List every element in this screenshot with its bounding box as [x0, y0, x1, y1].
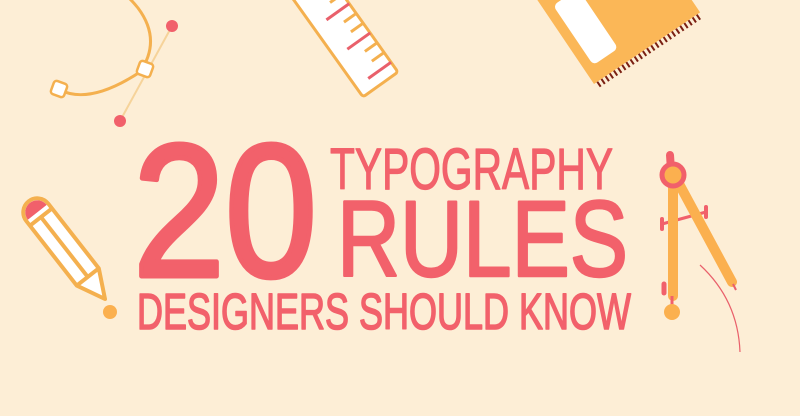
- title: [133, 106, 631, 340]
- title: RULES: RULES: [337, 178, 628, 299]
- icon: compass: [662, 155, 740, 352]
- icon: pencil dot: [103, 305, 117, 319]
- icon: notebook: [510, 0, 703, 89]
- title: number 20: 20: [133, 106, 317, 317]
- icon: pencil: [18, 193, 116, 308]
- icon: bezier curve tool: [50, 0, 178, 127]
- title: TYPOGRAPHY: TYPOGRAPHY: [330, 137, 613, 202]
- icon: ruler: [276, 0, 398, 97]
